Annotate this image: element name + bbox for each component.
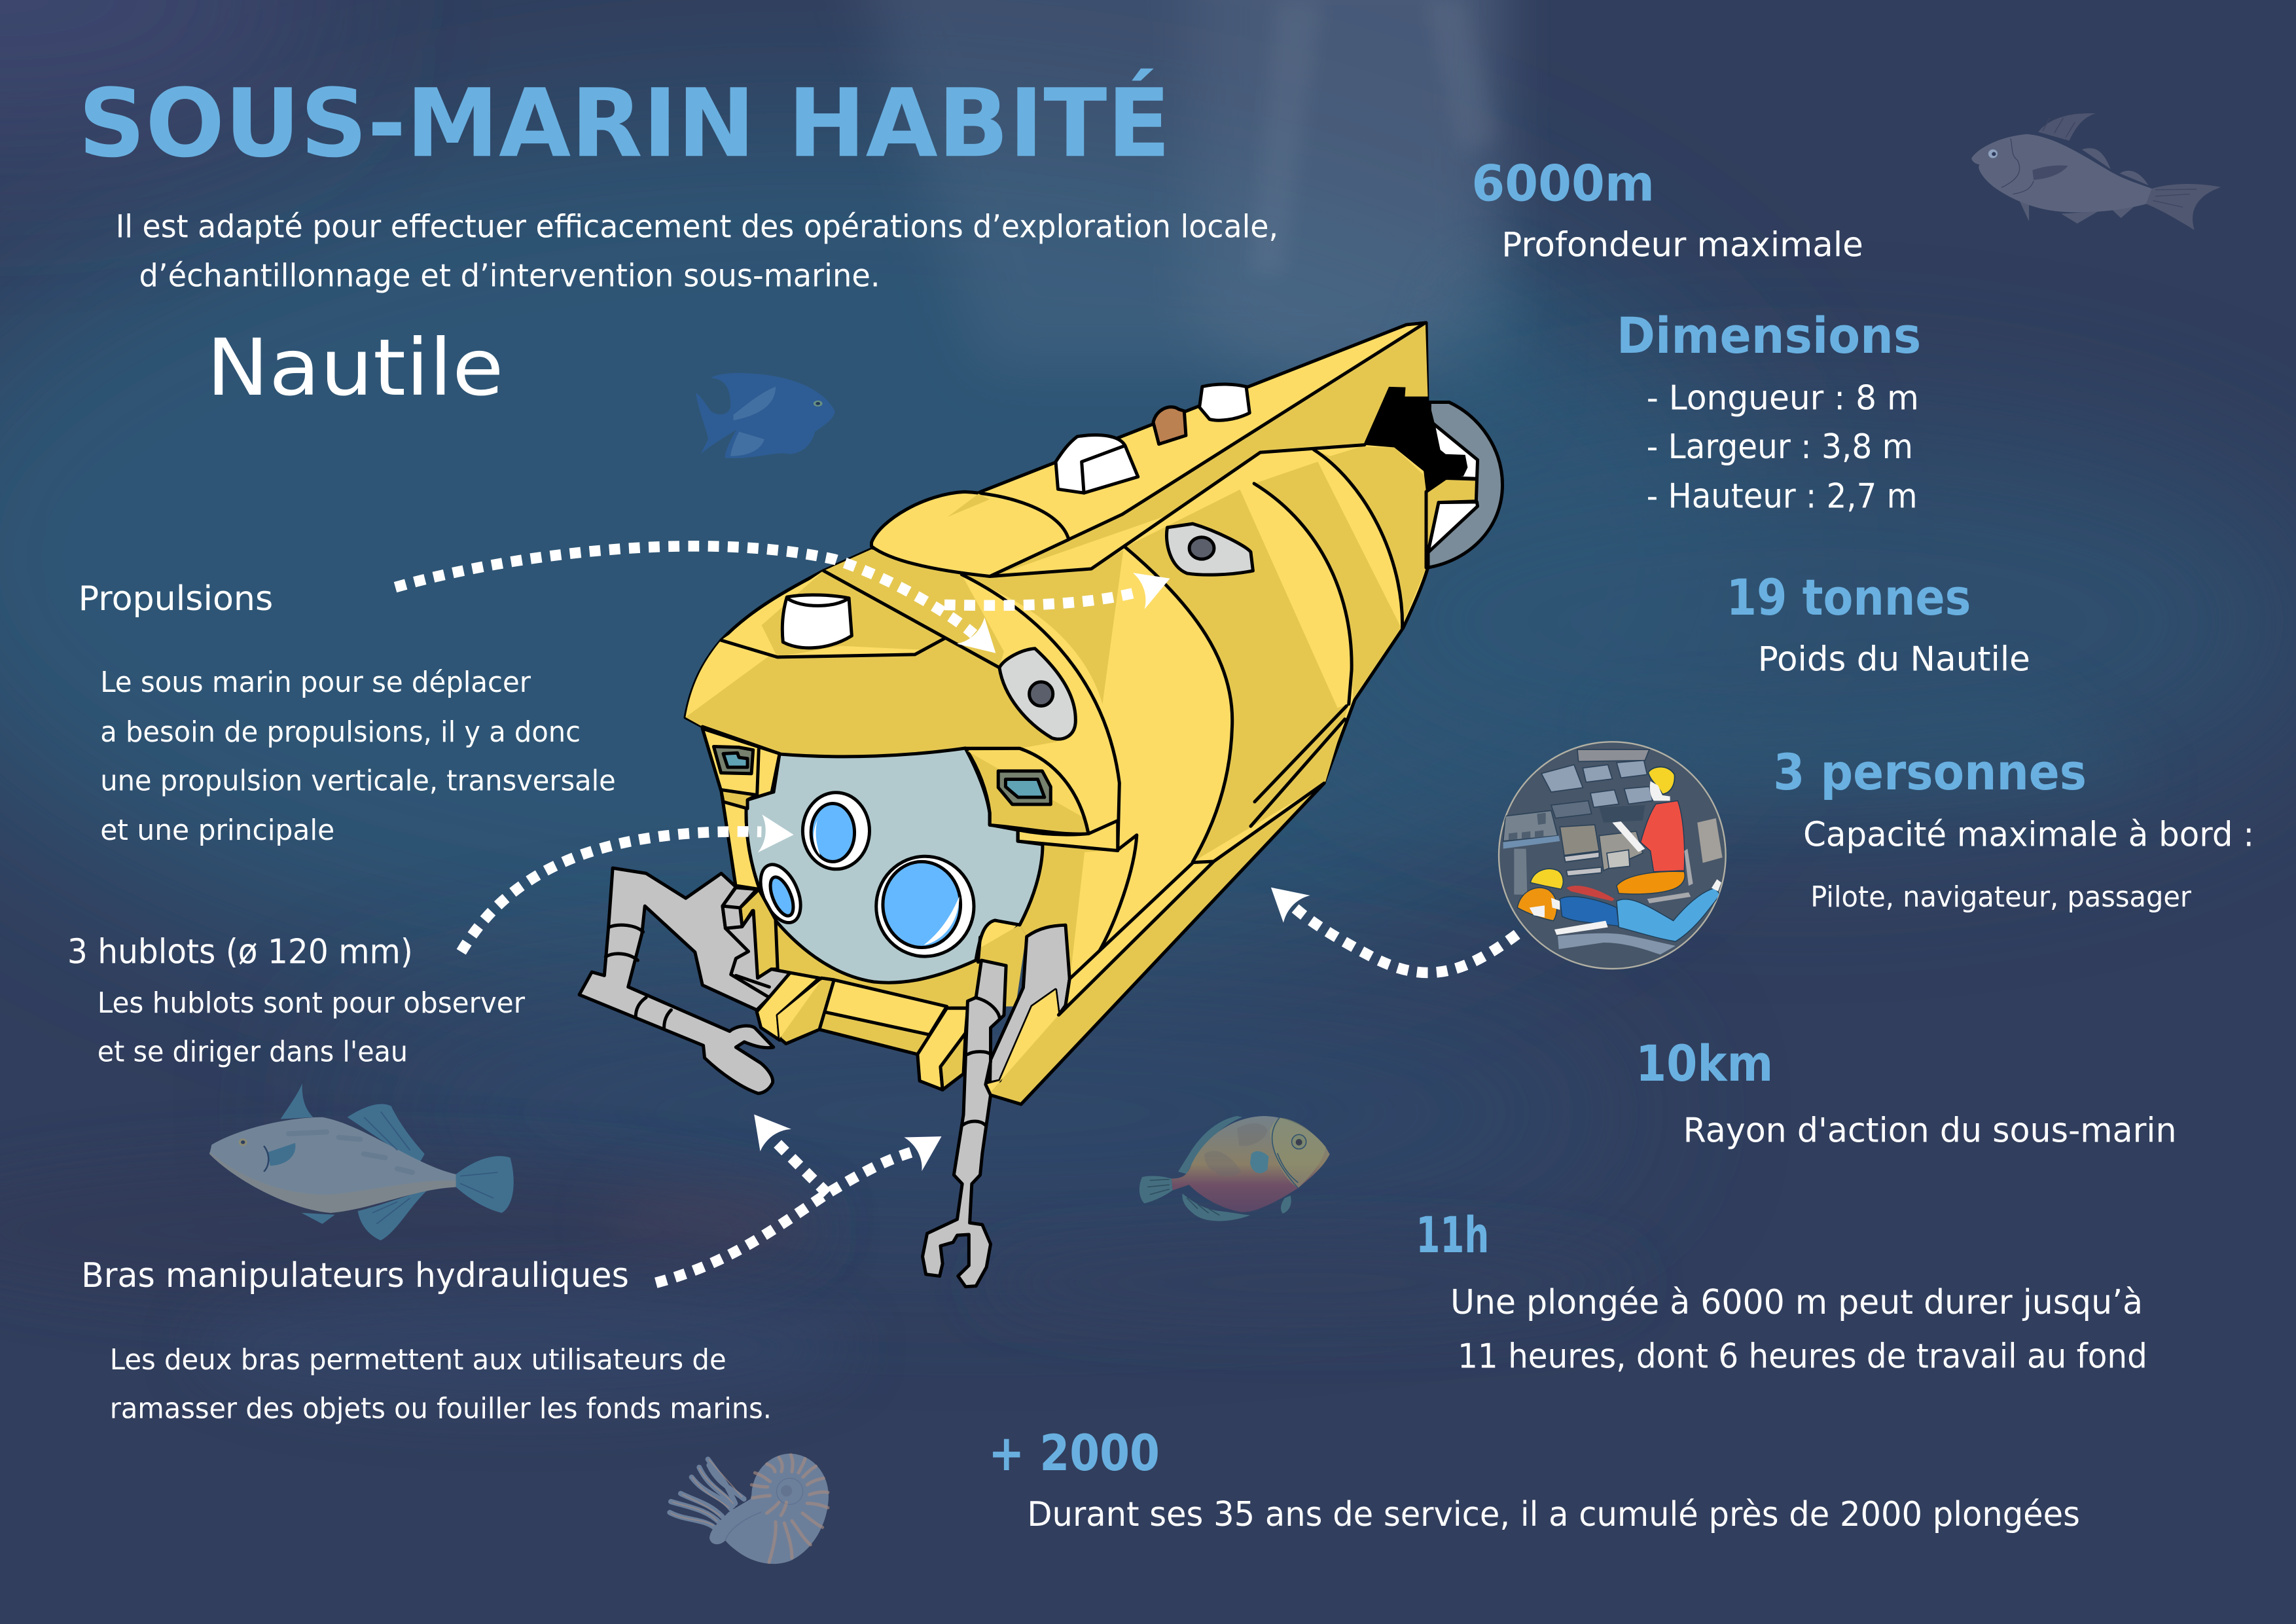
arrow: propulsion to front thruster — [395, 546, 1009, 667]
stat: duration — [1416, 1206, 2147, 1377]
left arm — [579, 868, 790, 1093]
arrow: crew to cabin — [1259, 873, 1517, 973]
stat: duration: 11h — [1416, 1206, 1489, 1264]
fish: grey, top right — [1971, 113, 2221, 230]
stat: dimensions: - Hauteur : 2,7 m — [1647, 477, 1918, 516]
stat: crew: 3 personnes — [1773, 743, 2087, 801]
block: bras manipulateurs — [81, 1256, 772, 1426]
stat: weight: Poids du Nautile — [1758, 640, 2030, 679]
crew: lying observers — [1530, 869, 1563, 889]
stat: depth: Profondeur maximale — [1501, 226, 1863, 265]
left front strip — [721, 791, 776, 969]
arrow: arms, to right gripper — [656, 1120, 952, 1283]
block: propulsions: Le sous marin pour se déplacer — [100, 666, 531, 699]
arrow: hublots — [461, 814, 795, 952]
rear skid and right arm strut — [985, 783, 1324, 1104]
rear bracket and black tail fitting — [1363, 387, 1477, 568]
block: propulsions: a besoin de propulsions, il y a donc — [100, 716, 581, 749]
block: propulsions: Propulsions — [79, 579, 273, 619]
porthole top — [802, 793, 869, 869]
stat: dives: Durant ses 35 ans de service, il a cumulé près de 2000 plongées — [1027, 1495, 2080, 1534]
portholes, left arm and front sled — [579, 793, 980, 1093]
dome — [871, 492, 1069, 576]
stat: dives: + 2000 — [988, 1424, 1160, 1482]
arrow: arms, to left gripper — [740, 1102, 827, 1193]
cowl with side window — [965, 748, 1088, 834]
block: hublots: Les hublots sont pour observer — [98, 987, 525, 1020]
block: hublots — [67, 932, 525, 1068]
block: propulsions: une propulsion verticale, transversale — [100, 765, 616, 797]
stat: duration: Une plongée à 6000 m peut durer jusqu’à — [1450, 1283, 2143, 1322]
hull base silhouette — [685, 323, 1428, 1104]
block: bras manipulateurs: Bras manipulateurs hydrauliques — [81, 1256, 629, 1295]
stat: weight: 19 tonnes — [1727, 568, 1971, 626]
stat: depth — [1471, 154, 1863, 265]
arrow: propulsion to side thruster — [944, 561, 1177, 609]
cabin front — [746, 748, 1043, 983]
crew circular inset — [1499, 742, 1726, 969]
block: propulsions — [79, 579, 616, 847]
white cylinder — [782, 595, 852, 648]
stat: dimensions: Dimensions — [1617, 306, 1921, 365]
porthole small — [753, 860, 808, 927]
stat: range — [1636, 1034, 2177, 1150]
intro text — [116, 208, 1278, 294]
right arm and gripper — [923, 960, 1006, 1287]
block: bras manipulateurs: ramasser des objets ou fouiller les fonds marins. — [110, 1393, 772, 1426]
upper left panel with window — [702, 729, 780, 800]
block: hublots: et se diriger dans l'eau — [98, 1036, 408, 1068]
block: bras manipulateurs: Les deux bras permettent aux utilisateurs de — [110, 1344, 726, 1377]
hull upper shading and panel lines — [685, 323, 1429, 862]
nautilus shell — [670, 1454, 829, 1564]
title: SOUS-MARIN HABITÉ — [79, 68, 1171, 178]
lower hull shading — [761, 835, 1137, 1007]
rear propeller shroud — [1428, 403, 1503, 568]
fish: orange, lower centre — [1139, 1116, 1330, 1221]
block: propulsions: et une principale — [100, 814, 334, 847]
stat: depth: 6000m — [1471, 154, 1655, 212]
name: Nautile: Nautile — [206, 323, 504, 414]
white box — [1056, 435, 1138, 493]
brown cap — [1153, 407, 1186, 444]
intro text: d’échantillonnage et d’intervention sous-marine. — [139, 257, 880, 294]
fish: blue, near Nautile — [696, 373, 835, 458]
submarine Nautile illustration — [579, 323, 1503, 1287]
stat: weight — [1727, 568, 2030, 679]
white top box — [1200, 384, 1249, 420]
block: hublots: 3 hublots (ø 120 mm) — [67, 932, 413, 971]
front sled — [757, 937, 980, 1090]
grey sensor disc front — [999, 649, 1075, 739]
stat: dives — [988, 1424, 2080, 1534]
stat: dimensions — [1617, 306, 1921, 516]
stat: range: Rayon d'action du sous-marin — [1683, 1111, 2177, 1150]
stat: crew: Pilote, navigateur, passager — [1810, 881, 2191, 914]
stat: crew — [1773, 743, 2254, 914]
porthole large — [876, 856, 974, 956]
top fittings, cowl, windows and sensors — [702, 384, 1253, 851]
stat: dimensions: - Largeur : 3,8 m — [1647, 427, 1913, 467]
grey sensor disc side — [1166, 524, 1253, 575]
stat: crew: Capacité maximale à bord : — [1803, 815, 2254, 854]
stat: dimensions: - Longueur : 8 m — [1647, 379, 1919, 418]
fish: pale, lower left — [209, 1083, 514, 1240]
stat: duration: 11 heures, dont 6 heures de travail au fond — [1458, 1337, 2147, 1377]
crew: pilot — [1648, 767, 1675, 794]
intro text: Il est adapté pour effectuer efficacement des opérations d’exploration locale, — [116, 208, 1278, 245]
stat: range: 10km — [1636, 1034, 1773, 1092]
